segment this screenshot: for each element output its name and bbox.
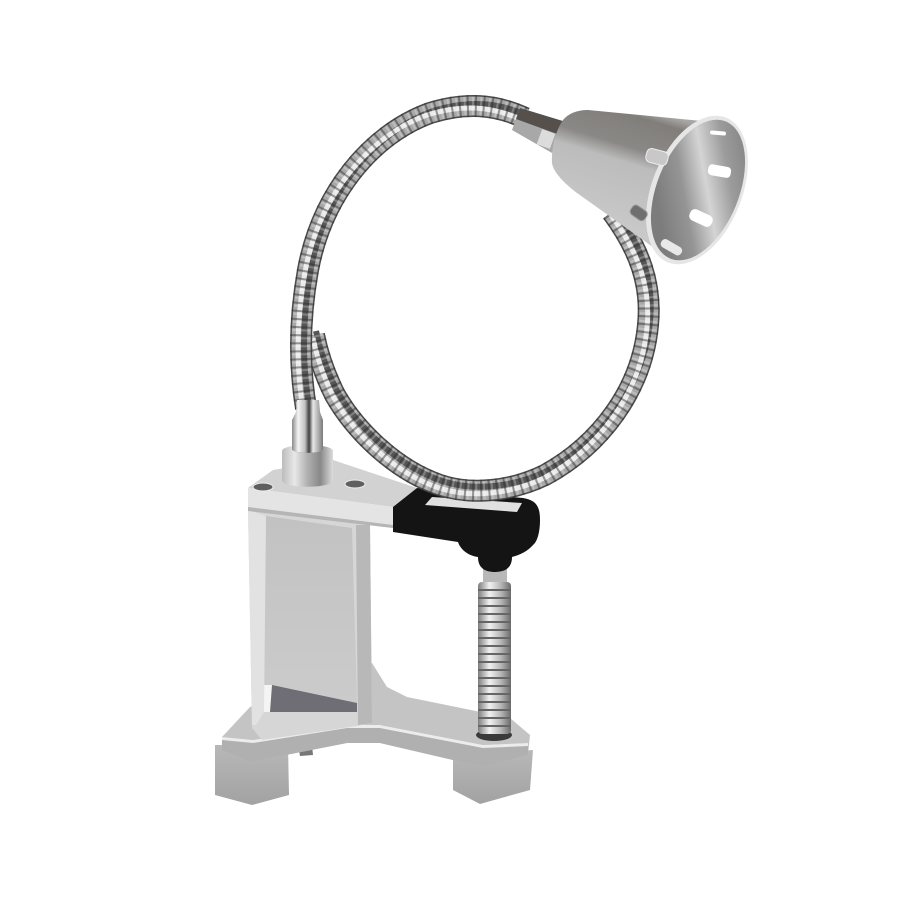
cone opening interior: [632, 106, 764, 274]
left hex foot: [215, 745, 289, 805]
side screws: [645, 147, 669, 167]
plate screws: [253, 483, 273, 491]
clamp base: [222, 663, 530, 767]
neck collar: [512, 108, 566, 153]
threaded clamp screw: [478, 568, 511, 734]
gooseneck arm: lower loop: [313, 208, 651, 494]
small bolt under base: [298, 745, 313, 756]
cone opening rim: [626, 101, 768, 279]
clamp top plate: [248, 460, 417, 528]
cone body: [552, 110, 740, 263]
washer: [476, 729, 512, 741]
right hex foot: [453, 750, 533, 804]
lamp head: [512, 101, 768, 279]
vent slots: [707, 164, 732, 179]
chrome ferrule: [282, 400, 333, 487]
clamp post: [248, 510, 372, 740]
base feet: [215, 745, 533, 805]
black clamp handle: [393, 488, 540, 572]
gooseneck arm: upper strand: [298, 104, 528, 410]
